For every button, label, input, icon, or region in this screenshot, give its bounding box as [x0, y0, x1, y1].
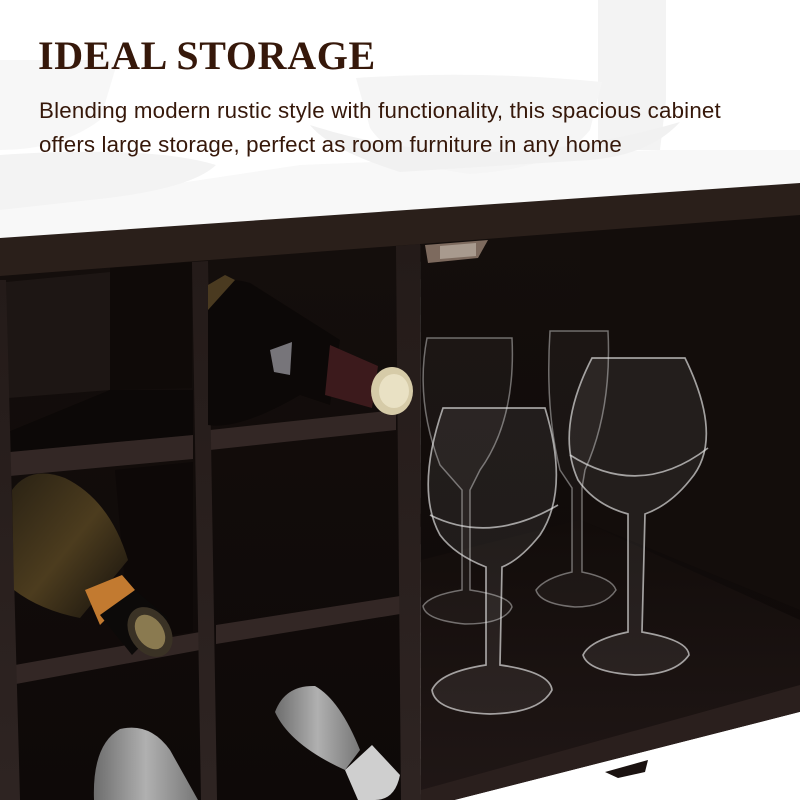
top rail — [0, 183, 800, 276]
description text: Blending modern rustic style with functionality, this spacious cabinet — [39, 98, 721, 123]
cabinet foot — [605, 760, 648, 778]
bottom rail — [421, 685, 800, 800]
bottle left — [12, 474, 182, 666]
wine glass back middle — [536, 331, 616, 607]
bottle upper — [208, 275, 413, 426]
tabletop items and surface — [0, 0, 800, 240]
upper-left opening lit back panel — [6, 272, 110, 398]
wine glass back left — [423, 338, 512, 624]
shelves — [8, 390, 400, 684]
cabinet interior left — [0, 235, 420, 800]
description text: offers large storage, perfect as room furniture in any home — [39, 132, 622, 157]
description text — [39, 98, 721, 157]
foil bottle tops — [94, 686, 400, 800]
wine glass front right — [569, 358, 708, 675]
vertical dividers — [0, 244, 421, 800]
wine glass front centre — [428, 408, 558, 714]
title: IDEAL STORAGE — [38, 33, 376, 78]
right compartment — [420, 205, 800, 800]
hinge — [425, 240, 488, 263]
